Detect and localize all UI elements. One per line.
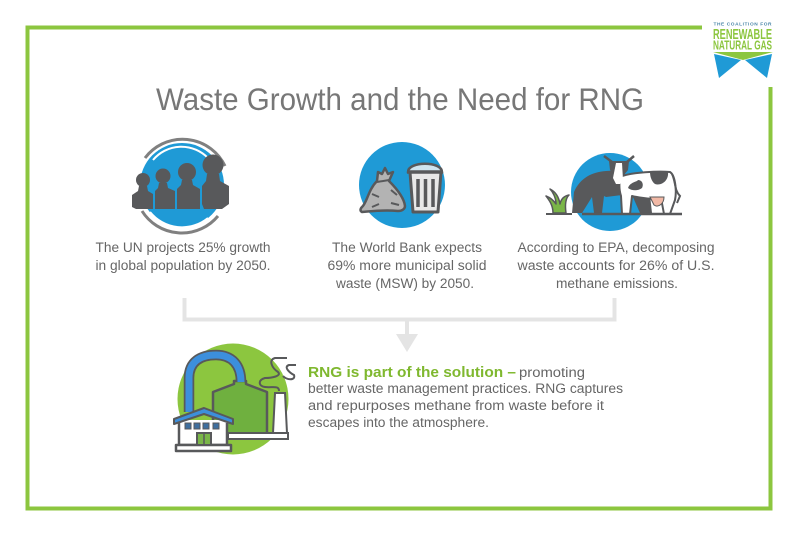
logo: THE COALITION FOR (714, 22, 772, 28)
text: UN projection: The UN projects 25% growth (96, 240, 270, 255)
text: RNG solution: escapes into the atmosphere. (308, 415, 489, 430)
text: EPA methane: waste accounts for 26% of U.S. (516, 258, 714, 273)
text: EPA methane (516, 240, 714, 291)
text: RNG solution: RNG is part of the solution – (308, 364, 516, 381)
text: UN projection: in global population by 2050. (96, 258, 270, 273)
icon: RNG plant (174, 344, 296, 454)
connector bracket and arrow (184, 298, 614, 352)
text: World Bank projection: 69% more municipal solid (328, 258, 486, 273)
title: Waste Growth and the Need for RNG (156, 81, 644, 117)
icon: people (132, 139, 229, 233)
text: RNG solution (308, 364, 623, 430)
text: RNG solution: promoting (519, 365, 585, 380)
text: EPA methane: methane emissions. (556, 276, 678, 291)
logo (713, 22, 773, 78)
text: World Bank projection (328, 240, 486, 291)
icon: trash bag and bin (359, 142, 445, 228)
icon: cows and grass (546, 153, 682, 231)
text: EPA methane: According to EPA, decomposing (518, 240, 714, 255)
text: World Bank projection: waste (MSW) by 2050. (335, 276, 474, 291)
text: RNG solution: better waste management practices. RNG captures (308, 381, 623, 396)
text: RNG solution: and repurposes methane from waste before it (308, 398, 604, 413)
text: UN projection (96, 240, 270, 273)
text: World Bank projection: The World Bank expects (332, 240, 482, 255)
